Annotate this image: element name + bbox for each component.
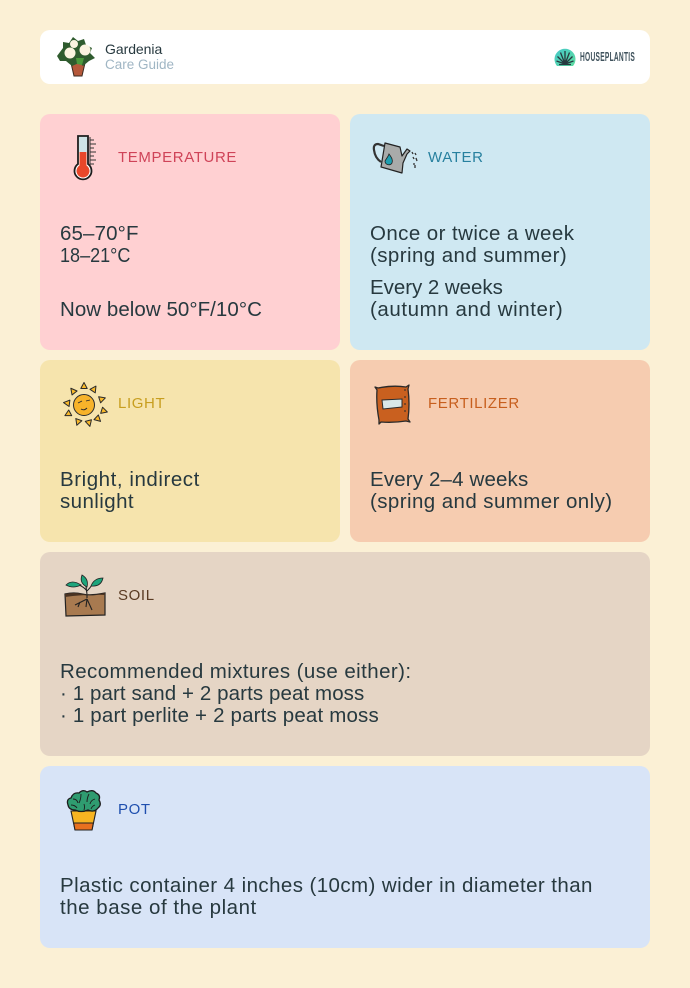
- subtitle: Care Guide: [105, 57, 174, 72]
- heading: SOIL: [118, 587, 155, 604]
- minimum temperature: Now below 50°F/10°C: [60, 298, 262, 321]
- spring and summer watering: [370, 222, 574, 267]
- recommended mixtures: [60, 660, 412, 727]
- pot description: Plastic container 4 inches (10cm) wider in diameter than: [60, 874, 593, 897]
- plant name: Gardenia: [105, 41, 162, 57]
- logo mark: [554, 48, 576, 66]
- temperature range: 65–70°F: [60, 222, 139, 245]
- light requirement: [60, 468, 200, 513]
- recommended mixtures: Recommended mixtures (use either):: [60, 660, 412, 683]
- recommended mixtures: · 1 part sand + 2 parts peat moss: [60, 682, 364, 705]
- light requirement: sunlight: [60, 490, 134, 513]
- spring and summer watering: (spring and summer): [370, 244, 567, 267]
- panel: fertilizer: [350, 360, 650, 542]
- heading: TEMPERATURE: [118, 149, 237, 166]
- temperature range: [60, 222, 139, 267]
- pot description: [60, 874, 593, 919]
- logo wordmark: HOUSEPLANTIS: [580, 50, 635, 64]
- recommended mixtures: · 1 part perlite + 2 parts peat moss: [60, 704, 379, 727]
- icon: sun: [63, 382, 108, 427]
- icon: watering can: [372, 142, 418, 174]
- spring and summer watering: Once or twice a week: [370, 222, 574, 245]
- fertilizer schedule: [370, 468, 612, 513]
- heading: WATER: [428, 149, 484, 166]
- light requirement: Bright, indirect: [60, 468, 200, 491]
- logo: houseplantis: [554, 48, 635, 66]
- icon: gardenia plant: [57, 37, 95, 76]
- autumn and winter watering: (autumn and winter): [370, 298, 563, 321]
- icon: thermometer: [74, 135, 96, 180]
- heading: FERTILIZER: [428, 395, 520, 412]
- icon: potted plant: [66, 790, 101, 830]
- pot description: the base of the plant: [60, 896, 257, 919]
- panel: soil: [40, 552, 650, 756]
- panel: water: [350, 114, 650, 350]
- autumn and winter watering: Every 2 weeks: [370, 276, 503, 299]
- icon: fertilizer bag: [374, 384, 411, 425]
- fertilizer schedule: (spring and summer only): [370, 490, 612, 513]
- panel: temperature: [40, 114, 340, 350]
- autumn and winter watering: [370, 276, 563, 321]
- heading: LIGHT: [118, 395, 165, 412]
- temperature range: 18–21°C: [60, 244, 130, 267]
- heading: POT: [118, 801, 151, 818]
- header bar: [40, 30, 650, 84]
- fertilizer schedule: Every 2–4 weeks: [370, 468, 528, 491]
- panel: light: [40, 360, 340, 542]
- panel: pot: [40, 766, 650, 948]
- icon: soil with sprout: [64, 574, 106, 617]
